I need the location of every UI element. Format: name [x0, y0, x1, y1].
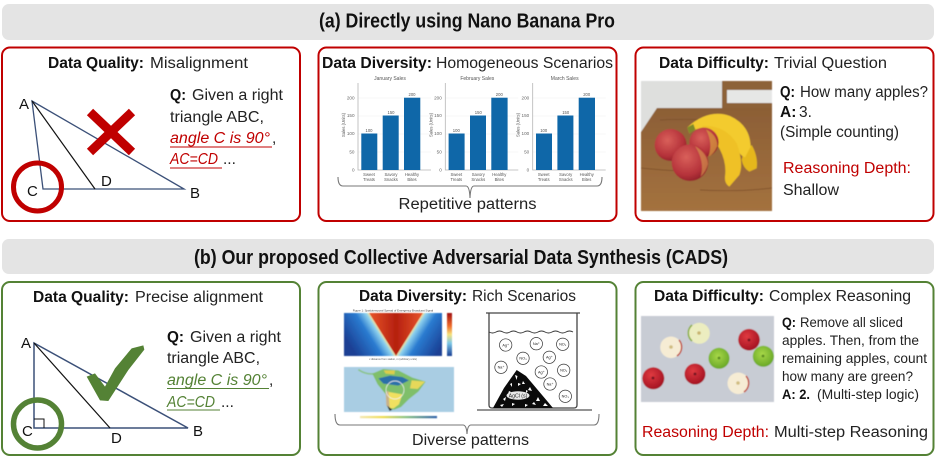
misaligned triangle diagram [19, 96, 200, 202]
bar chart: January Sales: Healthy [405, 172, 420, 177]
bar chart: January Sales: Snacks [384, 177, 398, 182]
reasoning depth: shallow [783, 160, 911, 199]
question and answer text: A: 2. [782, 386, 810, 402]
bar chart: March Sales: 100 [540, 128, 548, 133]
heading: data difficulty trivial [659, 55, 887, 72]
bar chart: March Sales: 200 [522, 96, 530, 100]
bar chart: March Sales: Sales (Units) [516, 112, 521, 137]
correct triangle diagram: A [21, 335, 31, 352]
bar chart: February Sales: Sales (Units) [428, 112, 433, 137]
bar chart: February Sales: February Sales [460, 76, 495, 82]
bar chart: January Sales: 150 [388, 110, 395, 115]
heading: data difficulty trivial: Data Difficulty: [659, 55, 769, 72]
panel: data diversity homogeneous [318, 48, 616, 221]
bar chart: March Sales: March Sales [551, 76, 579, 82]
icon: red cross [90, 112, 132, 152]
diagram: beaker with AgCl precipitate and ions: Ag⁺ [546, 356, 553, 360]
bar chart: January Sales: Sales (Units) [341, 112, 346, 137]
heading: data diversity rich [359, 288, 576, 305]
bar chart: March Sales: 150 [522, 113, 530, 118]
bar chart: March Sales: Treats [538, 177, 550, 182]
question text: , [272, 130, 276, 147]
photo: apples and bananas on table [641, 81, 772, 211]
correct triangle diagram: D [111, 430, 122, 447]
question text: angle C is 90° [167, 372, 267, 389]
question and answer text: (Multi-step logic) [817, 386, 919, 402]
circle highlighting angle C [14, 163, 62, 211]
circle highlighting right angle C [14, 400, 62, 448]
bar chart: March Sales: Bites [582, 177, 591, 182]
bar chart: March Sales [516, 76, 606, 182]
question and answer text: remaining apples, count [782, 350, 927, 366]
misaligned triangle diagram: B [190, 185, 200, 202]
bar chart: March Sales: Sweet [538, 172, 550, 177]
bar chart: January Sales: Savory [384, 172, 398, 177]
diagram: beaker with AgCl precipitate and ions: NO₃ [562, 395, 569, 399]
panel: data difficulty trivial [636, 48, 934, 221]
question text: triangle ABC, [167, 350, 260, 367]
heading: data quality misalignment: Data Quality: [48, 55, 144, 72]
correct triangle diagram [21, 335, 203, 447]
bar chart: February Sales: 150 [434, 113, 442, 118]
bar chart: February Sales: 200 [434, 96, 442, 100]
diagram: beaker with AgCl precipitate and ions: Na⁺ [498, 366, 504, 370]
brace under charts [338, 177, 602, 198]
reasoning depth: multi-step [642, 424, 928, 441]
bar chart: January Sales: Treats [363, 177, 375, 182]
bar chart: January Sales: Bites [407, 177, 417, 182]
caption: repetitive patterns: Repetitive patterns [398, 196, 537, 213]
bar chart: January Sales: 200 [347, 96, 355, 100]
question and answer text: (Simple counting) [780, 124, 899, 141]
question text: angle C is 90° [170, 130, 270, 147]
question and answer text [780, 84, 928, 141]
bar chart: February Sales: 50 [437, 150, 442, 154]
ions [495, 338, 572, 402]
header bar (a) [2, 4, 934, 40]
bar chart: February Sales: 150 [475, 110, 482, 115]
question and answer text: Q: [780, 84, 795, 101]
heading: data difficulty complex: Data Difficulty: [654, 288, 764, 305]
bar chart: February Sales: Treats [450, 177, 462, 182]
question and answer text: apples. Then, from the [782, 332, 919, 348]
misaligned triangle diagram: D [101, 173, 112, 190]
question text: , [269, 372, 273, 389]
bar chart: February Sales: Healthy [492, 172, 507, 177]
question and answer text: Q: [782, 314, 796, 330]
chart: South America map [344, 367, 454, 418]
bar chart: January Sales: 50 [349, 150, 355, 154]
diagram: beaker with AgCl precipitate and ions: Ag⁺ [502, 344, 509, 348]
header bar (b) [2, 239, 934, 274]
heading: data diversity homogeneous: Homogeneous Scenarios [436, 55, 613, 72]
bar chart: March Sales: 150 [562, 110, 570, 115]
bar chart: January Sales: 150 [347, 113, 355, 118]
correct triangle diagram: C [22, 423, 33, 440]
question and answer text: 3. [799, 104, 812, 121]
heading: data difficulty complex [654, 288, 911, 305]
question text: ... [223, 151, 236, 168]
icon: green check mark [87, 345, 144, 401]
chart: heatmap with colorbar: Figure 1: Spatiotemporal Spread of Emergency Broadcast Signal [353, 308, 434, 312]
question text: AC=CD [166, 394, 215, 411]
heading: data difficulty trivial: Trivial Question [774, 55, 887, 72]
question and answer text [782, 314, 927, 402]
bar chart: February Sales: 100 [453, 128, 460, 133]
bar chart: February Sales: Bites [495, 177, 504, 182]
diagram: beaker with AgCl precipitate and ions: NO₃ [559, 343, 567, 347]
bar chart: March Sales: Healthy [580, 172, 595, 177]
question text: AC=CD [169, 151, 218, 168]
heading: data diversity rich: Rich Scenarios [472, 288, 576, 305]
question text [169, 87, 284, 168]
question text: Q: [170, 87, 186, 104]
chart: heatmap with colorbar: x distance from station, m (arbitrary units) [369, 357, 417, 361]
misaligned triangle diagram: A [19, 96, 29, 113]
panel: data quality precise [2, 282, 300, 455]
heading: data diversity homogeneous [322, 55, 613, 72]
chart: heatmap with colorbar [344, 308, 452, 361]
misaligned triangle diagram: C [27, 183, 38, 200]
precipitate pile: AgCl (s) [509, 394, 528, 400]
bar chart: February Sales: 200 [496, 92, 503, 97]
diagram: beaker with AgCl precipitate and ions: NO₃ [519, 357, 527, 361]
bar chart: January Sales: 100 [366, 128, 373, 133]
bar chart: February Sales: Savory [472, 172, 486, 177]
bar chart: March Sales: 200 [583, 92, 591, 97]
question and answer text: A: [780, 104, 796, 121]
bar chart: January Sales: 200 [408, 92, 416, 97]
question text: ... [221, 394, 234, 411]
heading: data diversity homogeneous: Data Diversity: [322, 55, 432, 72]
correct triangle diagram: B [193, 423, 203, 440]
brace under images [335, 414, 599, 434]
reasoning depth: multi-step: Multi-step Reasoning [774, 424, 928, 441]
bar chart: January Sales: 100 [347, 131, 355, 136]
bar chart: January Sales: 0 [352, 168, 355, 172]
caption: diverse patterns: Diverse patterns [412, 432, 529, 449]
bar chart: February Sales: Snacks [471, 177, 485, 182]
question text: Given a right [190, 329, 282, 346]
reasoning depth: shallow: Shallow [783, 182, 840, 199]
header bar (a): (a) Directly using Nano Banana Pro [319, 10, 615, 32]
heading: data diversity rich: Data Diversity: [359, 288, 467, 305]
bar chart: March Sales: Savory [559, 172, 573, 177]
heading: data quality precise: Data Quality: [33, 289, 129, 306]
question and answer text: How many apples? [800, 84, 928, 101]
bar chart: February Sales: Sweet [450, 172, 463, 177]
question text: triangle ABC, [170, 109, 264, 126]
question text [166, 329, 282, 411]
diagram: beaker with AgCl precipitate and ions: Na⁺ [547, 382, 553, 386]
bar chart: March Sales: 100 [522, 131, 530, 136]
bar chart: February Sales: 0 [439, 168, 442, 172]
bar chart: February Sales: 100 [434, 131, 442, 136]
heading: data quality misalignment: Misalignment [150, 55, 249, 72]
question and answer text: how many are green? [782, 368, 913, 384]
bar chart: March Sales: 0 [527, 168, 530, 172]
panel: data difficulty complex [636, 282, 934, 455]
heading: data quality misalignment [48, 55, 249, 72]
panel: data diversity rich [318, 282, 616, 455]
reasoning depth: multi-step: Reasoning Depth: [642, 424, 769, 441]
heading: data quality precise: Precise alignment [135, 289, 264, 306]
bar chart: January Sales [341, 76, 431, 182]
reasoning depth: shallow: Reasoning Depth: [783, 160, 911, 177]
diagram: beaker with AgCl precipitate and ions: Na⁺ [533, 342, 540, 346]
heading: data difficulty complex: Complex Reasoning [769, 288, 911, 305]
bar chart: March Sales: Snacks [559, 177, 573, 182]
question and answer text: Remove all sliced [800, 314, 903, 330]
diagram: beaker with AgCl precipitate and ions: Ag⁺ [538, 370, 545, 374]
panel: data quality misalignment [2, 48, 300, 221]
question text: Q: [167, 329, 184, 346]
bar chart: January Sales: January Sales [374, 76, 406, 82]
header bar (b): (b) Our proposed Collective Adversarial Data Synthesis (CADS) [194, 247, 728, 269]
bar chart: February Sales [428, 76, 518, 182]
bar chart: March Sales: 50 [524, 150, 530, 154]
photo: whole and sliced apples [641, 316, 774, 402]
diagram: beaker with AgCl precipitate and ions [477, 313, 592, 410]
bar chart: January Sales: Sweet [363, 172, 376, 177]
question text: Given a right [192, 87, 284, 104]
diagram: beaker with AgCl precipitate and ions: NO₃ [560, 369, 568, 373]
heading: data quality precise [33, 289, 264, 306]
